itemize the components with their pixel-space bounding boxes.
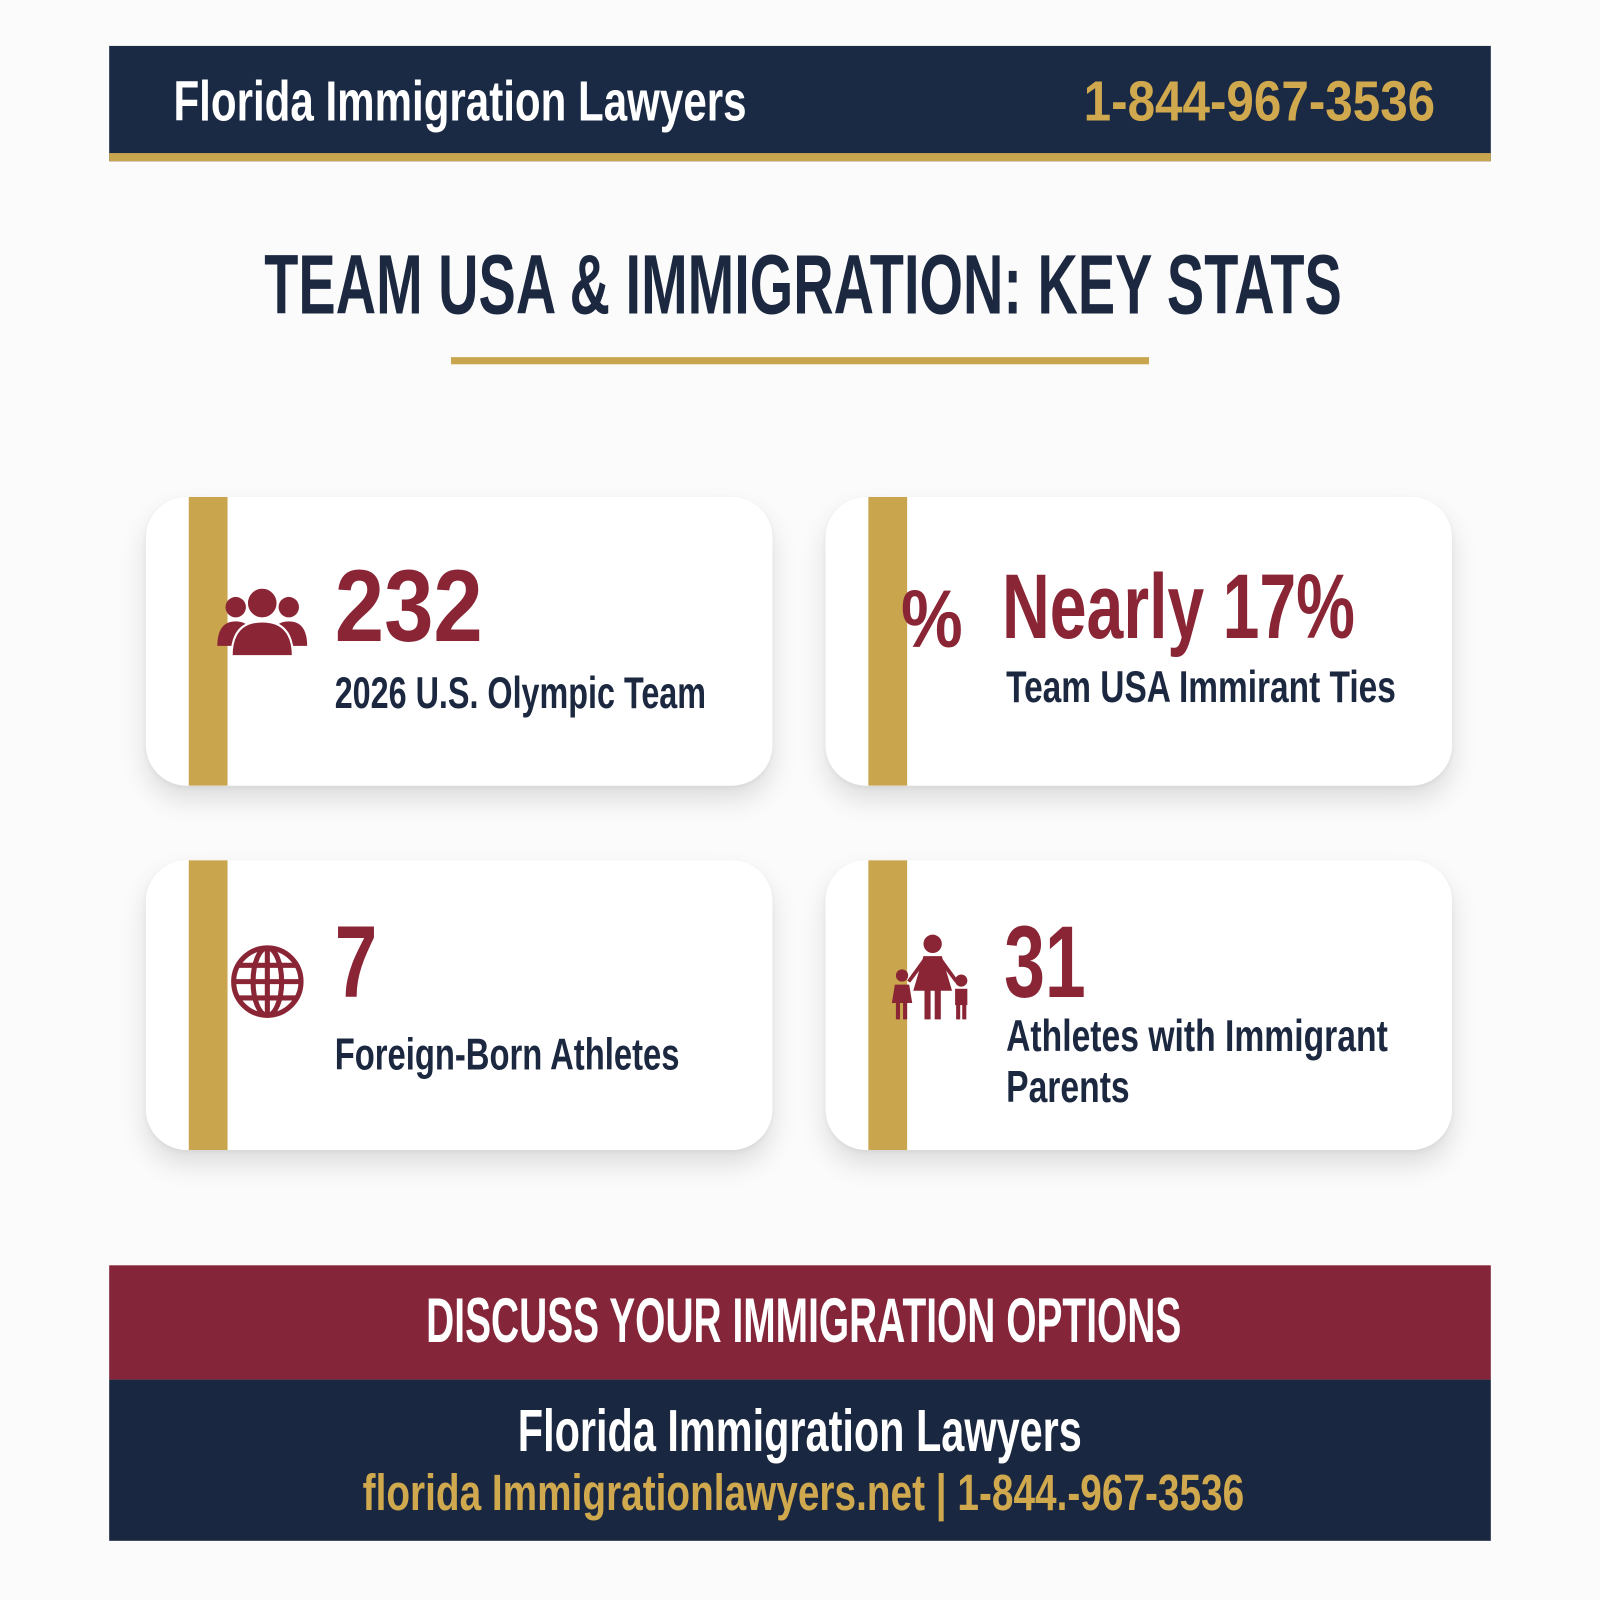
footer website and phone: florida Immigrationlawyers.net | 1-844.-967-3536 [362, 1464, 1244, 1521]
stat label: Foreign-Born Athletes [335, 1030, 679, 1080]
footer firm name: Florida Immigration Lawyers [518, 1398, 1082, 1464]
stat number: 31 [1004, 905, 1086, 1019]
stat number: 7 [335, 905, 377, 1019]
stat number: Nearly 17% [1002, 556, 1355, 658]
cta banner [109, 1265, 1491, 1380]
icon: people [217, 588, 308, 656]
header phone: 1-844-967-3536 [1084, 69, 1435, 133]
title: TEAM USA & IMMIGRATION: KEY STATS [264, 237, 1342, 332]
header bar [109, 46, 1491, 161]
icon: percent: % [901, 573, 963, 664]
stat label: Parents [1006, 1062, 1130, 1112]
header firm name: Florida Immigration Lawyers [173, 69, 747, 133]
title underline [451, 357, 1149, 364]
panel: nearly 17% [826, 497, 1452, 786]
icon: globe [231, 945, 304, 1018]
stat label: Team USA Immirant Ties [1006, 662, 1396, 712]
stat number: 232 [335, 549, 483, 663]
panel: 31 immigrant parents [826, 860, 1452, 1150]
cta text: DISCUSS YOUR IMMIGRATION OPTIONS [426, 1286, 1182, 1356]
stat label: Athletes with Immigrant [1006, 1011, 1388, 1061]
panel: 7 foreign-born [146, 860, 772, 1150]
stat label: 2026 U.S. Olympic Team [335, 668, 706, 718]
icon: family [892, 934, 968, 1020]
stat label [1006, 1011, 1388, 1112]
footer contact block [109, 1380, 1491, 1541]
panel: 232 olympic team [146, 497, 772, 786]
